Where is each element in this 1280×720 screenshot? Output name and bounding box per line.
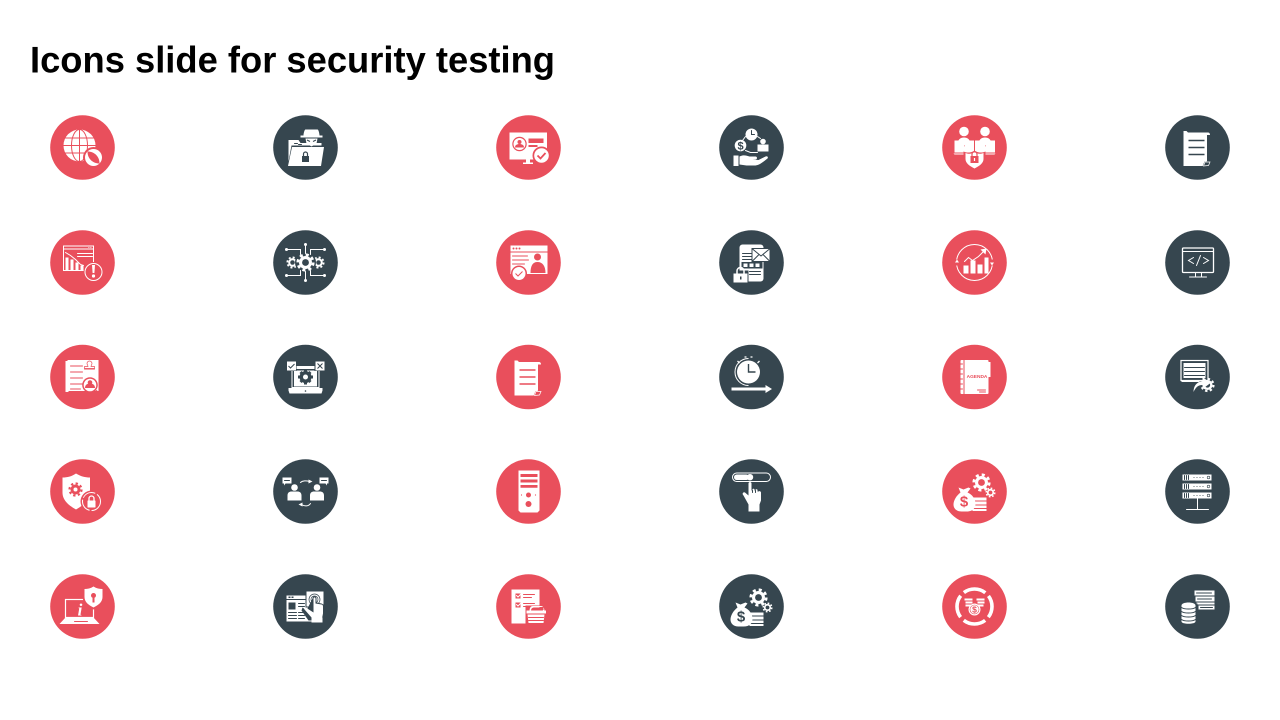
icon: coins in circular arrows: $ <box>972 604 977 614</box>
icon: two users with shield lock <box>942 115 1007 180</box>
icon: laptop info with shield <box>50 574 115 639</box>
icon: monitor with arrow and gear <box>1165 345 1230 409</box>
icon: document scroll dark <box>1165 115 1230 180</box>
icon: growth chart in circular arrows <box>942 230 1007 295</box>
icon: spy folder with lock <box>273 115 338 180</box>
icon: monitor with profile and check <box>496 115 561 180</box>
icon: agenda notebook <box>942 345 1007 409</box>
icon: laptop info with shield: i <box>78 600 83 620</box>
label: AGENDA: AGENDA <box>967 374 988 380</box>
icon: database with stacked servers <box>1165 574 1230 639</box>
icon: hand holding clock, dollar and person <box>719 115 784 180</box>
icon: two people exchanging messages <box>273 459 338 524</box>
icon: laptop with gear and check boxes <box>273 345 338 409</box>
icon: code monitor <box>1165 230 1230 295</box>
icon: coins in circular arrows <box>942 574 1007 639</box>
icon: hand pressing slider <box>719 459 784 524</box>
icon: gears with circuit nodes <box>273 230 338 295</box>
icon: stopwatch over arrow <box>719 345 784 409</box>
icon: hand holding clock, dollar and person: $ <box>737 140 744 152</box>
icon: checklist with shopping basket <box>496 574 561 639</box>
icon: globe with compass <box>50 115 115 180</box>
icon: server rack network <box>1165 459 1230 524</box>
icon: computer tower <box>496 459 561 524</box>
icon: money bag with gears (dark) <box>719 574 784 639</box>
icon: document with search user <box>50 345 115 409</box>
icon: browser window with user and check <box>496 230 561 295</box>
icon: web page with touch hand <box>273 574 338 639</box>
icon: money bag with gears (red) <box>942 459 1007 524</box>
title: Icons slide for security testing <box>30 40 555 80</box>
icon: document scroll red <box>496 345 561 409</box>
icon: browser chart with alert <box>50 230 115 295</box>
icon: phone with envelope and lock <box>719 230 784 295</box>
icon: shield with gear and lock <box>50 459 115 524</box>
